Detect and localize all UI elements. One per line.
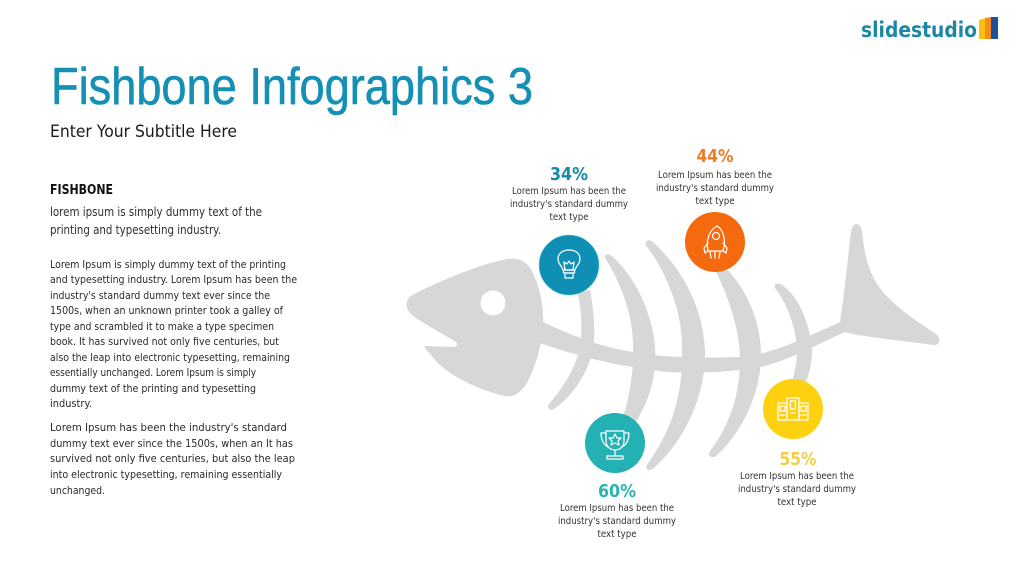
description: text type (550, 212, 589, 223)
body paragraph 1: 1500s, when an unknown printer took a galley of (50, 304, 283, 317)
description: industry's standard dummy (738, 484, 856, 495)
body paragraph 1: book. It has survived not only five centuries, but (50, 335, 279, 348)
rib 3 (646, 240, 705, 470)
description: text type (696, 196, 735, 207)
subtitle: Enter Your Subtitle Here (50, 122, 237, 141)
body paragraph 2: unchanged. (50, 484, 105, 497)
description: industry's standard dummy (656, 183, 774, 194)
heading: fishbone: FISHBONE (50, 183, 113, 198)
callout: 34% (510, 164, 628, 295)
intro text (50, 205, 262, 237)
panel: left text (50, 183, 297, 497)
tail (840, 224, 939, 345)
description: industry's standard dummy (510, 199, 628, 210)
fishbone diagram (407, 224, 939, 470)
description (656, 170, 774, 207)
callout: 44% (656, 146, 774, 272)
description: industry's standard dummy (558, 516, 676, 527)
icon: trophy (585, 413, 645, 473)
percentage: 60% (598, 481, 636, 502)
body paragraph 1: type and scrambled it to make a type specimen (50, 320, 274, 333)
intro text: printing and typesetting industry. (50, 223, 221, 237)
percentage: 44% (696, 146, 734, 167)
body paragraph 1: dummy text of the printing and typesetting (50, 382, 256, 395)
callout: 55% (738, 379, 856, 508)
body paragraph 2: dummy text ever since the 1500s, when an It has (50, 437, 293, 450)
spine (537, 321, 845, 373)
description: Lorem Ipsum has been the (658, 170, 772, 181)
body paragraph 1: Lorem Ipsum is simply dummy text of the printing (50, 258, 286, 271)
description: Lorem Ipsum has been the (512, 186, 626, 197)
rib 5 (775, 284, 812, 385)
description (510, 186, 628, 223)
fish head (407, 259, 543, 396)
body paragraph 2: Lorem Ipsum has been the industry's standard (50, 421, 287, 434)
fish eye (480, 290, 506, 316)
rib 4 (709, 270, 761, 457)
body paragraph 1 (50, 258, 297, 410)
body paragraph 2 (50, 421, 295, 497)
description: text type (778, 497, 817, 508)
description (738, 471, 856, 508)
intro text: lorem ipsum is simply dummy text of the (50, 205, 262, 219)
logo: slidestudio: slidestudio (861, 18, 977, 42)
callout: 60% (558, 413, 676, 540)
description: Lorem Ipsum has been the (560, 503, 674, 514)
percentage: 55% (780, 449, 816, 470)
title: Fishbone Infographics 3 (51, 58, 533, 116)
rib 2 (605, 254, 655, 425)
description: Lorem Ipsum has been the (740, 471, 854, 482)
body paragraph 1: industry. (50, 397, 92, 410)
body paragraph 1: and typesetting industry. Lorem Ipsum has been the (50, 273, 297, 286)
description (558, 503, 676, 540)
body paragraph 1: essentially unchanged. Lorem Ipsum is simply (50, 366, 257, 379)
rib 1 (548, 290, 594, 410)
icon: rocket (685, 212, 745, 272)
icon: light bulb (539, 235, 599, 295)
icon: buildings (763, 379, 823, 439)
body paragraph 2: into electronic typesetting, remaining essentially (50, 468, 283, 481)
description: text type (598, 529, 637, 540)
percentage: 34% (550, 164, 588, 185)
body paragraph 1: also the leap into electronic typesetting, remaining (50, 351, 290, 364)
body paragraph 2: survived not only five centuries, but also the leap (50, 452, 295, 465)
body paragraph 1: industry's standard dummy text ever since the (50, 289, 270, 302)
